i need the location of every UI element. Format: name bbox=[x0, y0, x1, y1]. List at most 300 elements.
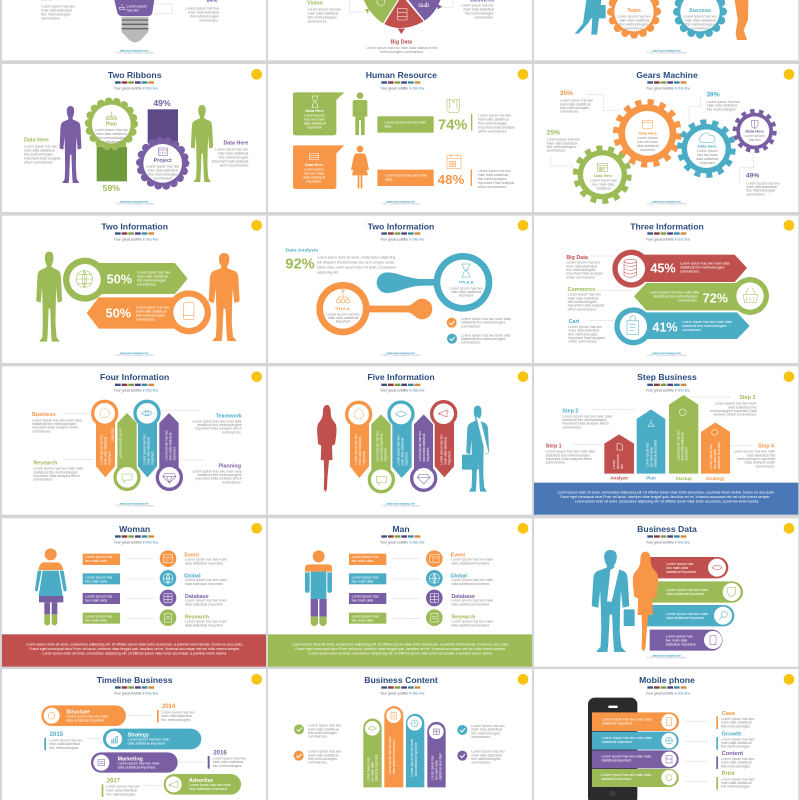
green arrow: 72% bbox=[703, 291, 728, 305]
panel: light bulb slide: © 2017 The Name Rockford Importers bbox=[115, 51, 155, 54]
label: Print: main data statistical bbox=[721, 781, 752, 785]
green bar: data. bbox=[384, 124, 392, 128]
panel: Human Resource: © 2017 The Name Rockford Importers bbox=[381, 203, 421, 206]
gear: orange: data statistical bbox=[637, 144, 659, 148]
orange bar bbox=[377, 170, 434, 186]
step house: Analyze: Lorem bbox=[612, 460, 616, 469]
title: Step Business bbox=[637, 372, 697, 382]
label: Step 2: statistical this methodologies bbox=[562, 418, 607, 422]
pill: Advertise: data statistical important. bbox=[189, 787, 228, 791]
stat 48%: which summarizes bbox=[478, 185, 507, 189]
orange arrow: main data statistical bbox=[136, 309, 167, 313]
column: red bbox=[432, 402, 456, 477]
label: Content: Lorem Ipsum has two bbox=[721, 757, 754, 761]
label: Planning: Important Data analysis which bbox=[195, 477, 242, 481]
Data Analysis stat: 92% bbox=[285, 256, 315, 272]
panel: Team and Success slide: © 2017 The Name Rockford Importers bbox=[647, 51, 687, 54]
column: green: main data statistical bbox=[379, 433, 383, 461]
text band: Lorem ipsum dolor sit amet, consectetur adipiscing elit. Ut efficitur ipsum vitae tortor accumsan, a pulvinar lorem lacinia. Donec eu arcu justo. bbox=[26, 642, 243, 646]
label: Commerce: main data statistical bbox=[568, 296, 598, 300]
column: blue: Lorem Ipsum has two bbox=[142, 434, 146, 465]
label: Research: Research bbox=[33, 461, 57, 467]
panel: Timeline Business: Your great subtitle in this line bbox=[114, 691, 158, 695]
pill: purple: Lorem Ipsum has bbox=[666, 634, 693, 638]
row: Global bbox=[349, 570, 493, 587]
label: Step 4: methodologies Important bbox=[737, 457, 775, 461]
label: Step 2: Lorem Ipsum has two main data bbox=[562, 414, 612, 418]
label: Cart: this methodologies bbox=[568, 332, 598, 336]
phone bbox=[588, 698, 637, 800]
label: Business: statistical this methodologies bbox=[32, 422, 77, 426]
man silhouette legs bbox=[575, 0, 606, 35]
stat 49% bbox=[746, 173, 780, 196]
check: teal: Lorem Ipsum has two bbox=[471, 724, 505, 728]
gear: green bbox=[576, 148, 629, 201]
gear: Team: summarizes bbox=[625, 26, 644, 30]
step house: Plan: Plan bbox=[646, 476, 656, 481]
row: Database: Lorem Ipsum has bbox=[85, 594, 113, 598]
Data Analysis stat bbox=[285, 248, 397, 275]
label: Research: Important Data analysis which bbox=[33, 474, 80, 478]
panel: Gears Machine: www.yourcompany.com bbox=[653, 201, 682, 204]
text band: Lorem ipsum dolor sit amet, consectetur adipiscing elit. Ut efficitur ipsum vitae tortor accumsan, a pulvinar lorem lacinia. Donec eu arcu justo. bbox=[292, 642, 509, 646]
check item 1: statistical this methodologies bbox=[461, 321, 506, 325]
label: Big Data: this methodologies bbox=[566, 268, 596, 272]
panel: Woman: Your great subtitle in this line bbox=[114, 540, 158, 544]
gear: blue bbox=[680, 122, 733, 175]
badge bbox=[251, 69, 262, 80]
row: Global: two main data bbox=[85, 579, 107, 583]
label: Step 3: Step 3 bbox=[739, 395, 755, 401]
gear: green: two main data bbox=[592, 183, 614, 187]
orange arrow: Lorem Ipsum has two bbox=[136, 305, 169, 309]
pill: red: statistical important bbox=[666, 570, 696, 574]
Business text: summarizes. bbox=[474, 15, 494, 19]
label: Planning bbox=[192, 463, 242, 484]
pill: Advertise: Advertise bbox=[189, 778, 213, 784]
Data Analysis stat: adipiscing elit. bbox=[317, 271, 339, 275]
check item 2: statistical this methodologies bbox=[461, 337, 506, 341]
row: Global: Lorem Ipsum has bbox=[85, 575, 113, 579]
label: Growth: this methodologies bbox=[721, 745, 750, 749]
step house: Plan: two main data bbox=[649, 447, 653, 467]
panel: Two Information arrows: © 2017 The Name Rockford Importers bbox=[115, 354, 155, 357]
label: Commerce: this methodologies bbox=[568, 300, 597, 304]
step house: Analyze: Ipsum has bbox=[616, 454, 620, 469]
orange connector circle: main data statistical bbox=[328, 316, 359, 320]
gear: green: statistical bbox=[596, 187, 611, 191]
column: orange: data statistical important bbox=[392, 740, 396, 774]
column: purple: main data statistical bbox=[168, 432, 172, 460]
gear: orange: has two main bbox=[637, 140, 658, 144]
row: Database: data statistical important. bbox=[185, 603, 224, 607]
year 2017: this methodologies bbox=[106, 792, 136, 796]
gear: Success bbox=[677, 0, 723, 35]
label: Content: main data statistical bbox=[721, 761, 752, 765]
gear: purple: has two bbox=[749, 138, 761, 142]
band: Print: Lorem Ipsum has two main data bbox=[601, 773, 651, 777]
panel: Gears Machine: © 2017 The Name Rockford Importers bbox=[647, 203, 687, 206]
bulb base: Lorem Ipsum bbox=[127, 4, 147, 8]
check item 2 bbox=[447, 333, 511, 345]
label: Step 4: data statistical this bbox=[747, 453, 776, 457]
row: Global: Global bbox=[184, 574, 201, 580]
text band: Fusce eget consequat risus Proin vel lacus, interdum vitae feugiat quis, faucibus vel mi. Vivamus accumsan nisl vel nulla viverra semper. bbox=[560, 495, 770, 499]
panel: Two Information blobs bbox=[268, 216, 532, 363]
label: Case: Case bbox=[722, 711, 735, 717]
check: purple: Lorem Ipsum has two bbox=[471, 750, 505, 754]
column: green: important. bbox=[111, 428, 115, 442]
label: Cart: Lorem Ipsum has two bbox=[568, 325, 602, 329]
red arrow: summarizes. bbox=[680, 270, 700, 274]
check item 2: Lorem Ipsum has two main data bbox=[461, 333, 511, 337]
label: Research: summarizes. bbox=[33, 478, 53, 482]
label: Case bbox=[716, 711, 754, 729]
row: Research: Research bbox=[185, 615, 209, 621]
check item 1: Lorem Ipsum has two main data bbox=[461, 317, 511, 321]
gear: orange: important bbox=[640, 148, 655, 152]
title: Human Resource bbox=[366, 70, 437, 80]
ribbon: Plan: Plan bbox=[106, 122, 117, 128]
column: green: Lorem Ipsum has bbox=[367, 757, 371, 782]
check: purple: this methodologies bbox=[471, 757, 501, 761]
panel: Human Resource bbox=[268, 64, 532, 212]
row: Database: Lorem Ipsum has bbox=[352, 594, 379, 598]
label: Content: Content bbox=[722, 751, 743, 757]
green callout: Lorem Ipsum bbox=[304, 114, 325, 118]
label: Step 1 bbox=[546, 444, 595, 465]
pill: blue bbox=[646, 605, 734, 626]
row: Event: data statistical important. bbox=[185, 561, 224, 565]
Business text: main data statistical bbox=[463, 7, 494, 11]
column: blue: Lorem Ipsum has two bbox=[397, 435, 401, 466]
check: orange: summarizes. bbox=[308, 761, 328, 765]
column: green bbox=[363, 718, 382, 787]
label: Growth bbox=[716, 731, 754, 750]
step house: Strategy: Strategy bbox=[706, 476, 725, 481]
column: purple bbox=[427, 722, 446, 787]
pill: purple bbox=[650, 630, 722, 651]
badge bbox=[518, 674, 528, 685]
stat 35%: summarizes bbox=[560, 110, 579, 114]
column: purple: important. bbox=[172, 446, 176, 460]
panel: Four Information: © 2017 The Name Rockford Importers bbox=[115, 505, 155, 508]
row: Global: two main data bbox=[352, 579, 373, 583]
orange callout: data statistical bbox=[303, 176, 325, 180]
left stat: summarizes. bbox=[41, 16, 61, 20]
label: Growth: Lorem Ipsum has two bbox=[721, 737, 754, 741]
left stat: main data statistical bbox=[41, 8, 72, 12]
panel: Mobile phone bbox=[534, 669, 798, 800]
year 2014: 2014 bbox=[162, 704, 176, 710]
check: teal bbox=[457, 724, 505, 739]
orange connector circle: TITLE A bbox=[335, 306, 350, 311]
panel: light bulb slide bbox=[2, 0, 266, 60]
pill: Marketing: data statistical important. bbox=[118, 765, 156, 769]
stat 25%: this methodologies bbox=[547, 145, 576, 149]
label: Step 1: Lorem Ipsum has two main data bbox=[546, 450, 595, 454]
column: blue bbox=[135, 401, 159, 477]
right text: Lorem Ipsum has two bbox=[215, 147, 248, 151]
green callout: data statistical bbox=[304, 122, 326, 126]
label: Step 3: methodologies Important Data bbox=[710, 409, 757, 413]
band: Growth bbox=[592, 732, 679, 750]
check: purple: summarizes. bbox=[471, 761, 491, 765]
pill: Structure bbox=[41, 705, 126, 726]
right text: this methodologies bbox=[219, 155, 249, 159]
label: Print bbox=[716, 771, 754, 790]
orange bar: Lorem Ipsum has two main bbox=[385, 174, 427, 178]
ribbon: Project: Lorem Ipsum has two bbox=[146, 165, 179, 169]
step house: Startup: main data statistical bbox=[681, 432, 685, 460]
row: Research bbox=[83, 609, 227, 627]
ribbon: Plan bbox=[89, 101, 134, 193]
panel: Human Resource: Your great subtitle in this line bbox=[380, 86, 425, 90]
right text: which summarizes bbox=[220, 163, 249, 167]
year 2017: Lorem Ipsum has two bbox=[106, 785, 140, 789]
label: Big Data: Important Data analysis bbox=[566, 272, 603, 276]
Big Data text: Lorem Ipsum has two main data statistical this bbox=[366, 46, 438, 50]
year 2015: 2015 bbox=[50, 732, 64, 738]
step house: Plan bbox=[637, 409, 665, 481]
text band bbox=[268, 634, 532, 667]
green man bbox=[36, 252, 62, 342]
column: purple: two main data bbox=[435, 760, 439, 780]
column: purple: Lorem Ipsum has bbox=[431, 755, 435, 780]
label: Step 2: summarizes. bbox=[562, 425, 582, 429]
text band: Fusce eget consequat risus Proin vel lacus, interdum vitae feugiat quis, faucibus vel mi. Vivamus accumsan nisl vel nulla viverra semper. bbox=[295, 647, 506, 651]
woman icon bbox=[351, 146, 369, 189]
left text: this methodologies bbox=[24, 152, 53, 156]
column: purple bbox=[412, 414, 436, 490]
green callout: important. bbox=[307, 126, 322, 130]
panel: Three Information bbox=[534, 216, 798, 363]
row: Research: Lorem Ipsum has bbox=[352, 614, 379, 618]
panel: Gears Machine bbox=[534, 64, 798, 212]
label: Case: main data statistical bbox=[721, 721, 752, 725]
Vision text: Vision bbox=[307, 1, 323, 7]
teal connector circle: TITLE B bbox=[458, 280, 474, 285]
row: Global bbox=[83, 570, 227, 587]
label: Step 4: Lorem Ipsum has two main bbox=[733, 450, 775, 454]
stat 25%: main data statistical bbox=[547, 141, 577, 145]
row: Database: Lorem Ipsum has two main bbox=[451, 599, 493, 603]
panel: Gears Machine: Your great subtitle in this line bbox=[646, 86, 690, 90]
row: Database bbox=[83, 590, 227, 607]
Vision text: this methodologies bbox=[308, 15, 337, 19]
year 2016: main data statistical bbox=[213, 760, 243, 764]
panel: Step Business: Your great subtitle in this line bbox=[646, 388, 690, 392]
gear: Team: main data statistical bbox=[619, 18, 650, 22]
label: Commerce bbox=[568, 287, 605, 311]
panel: Two Information blobs: Your great subtitle in this line bbox=[380, 237, 425, 241]
bulb base bbox=[114, 0, 173, 42]
year 2016 bbox=[208, 750, 246, 769]
teal connector circle: important bbox=[459, 294, 473, 298]
label: Teamwork: Important Data analysis which bbox=[195, 427, 242, 431]
blue arrow: Lorem Ipsum has two main data bbox=[682, 320, 732, 324]
title: Business Content bbox=[364, 675, 438, 685]
gear: orange: Data Here bbox=[638, 130, 658, 135]
gear: blue: has two main bbox=[697, 153, 718, 157]
label: Content bbox=[716, 751, 754, 769]
badge bbox=[251, 674, 262, 685]
orange callout: Lorem Ipsum bbox=[304, 168, 324, 172]
column: orange: important. bbox=[108, 451, 112, 465]
pill: Structure: data statistical important. bbox=[66, 719, 105, 723]
row: Global: data statistical important. bbox=[185, 582, 224, 586]
stat 74%: 74% bbox=[438, 117, 467, 133]
step house: Strategy: two main data bbox=[713, 449, 717, 469]
title: Two Ribbons bbox=[108, 70, 162, 80]
label: Planning: summarizes. bbox=[222, 480, 242, 484]
panel: Four Information: Your great subtitle in this line bbox=[114, 388, 158, 392]
step house: Startup: Lorem Ipsum has two bbox=[677, 430, 681, 460]
pill: Strategy bbox=[103, 729, 201, 749]
row: Event: Lorem Ipsum has two main bbox=[185, 557, 227, 561]
row: Research bbox=[349, 609, 493, 627]
right stat: this methodologies bbox=[190, 14, 219, 18]
green arrow: summarizes. bbox=[137, 283, 157, 287]
label: Business: summarizes. bbox=[32, 429, 52, 433]
stat 49%: main data statistical bbox=[746, 185, 777, 189]
row: Event: Event bbox=[451, 553, 465, 559]
label: Business: Important Data analysis which bbox=[32, 426, 79, 430]
panel: Two Ribbons bbox=[2, 64, 266, 212]
column: orange bbox=[347, 402, 371, 478]
ribbon: Plan: summarizes bbox=[102, 140, 121, 144]
column: blue: main data statistical bbox=[146, 437, 150, 465]
row: Event: Lorem Ipsum has bbox=[352, 555, 379, 559]
check: purple: main data statistical bbox=[471, 753, 502, 757]
panel: Business Data: © 2017 The Name Rockford Importers bbox=[647, 657, 687, 660]
label: Content: this methodologies bbox=[721, 764, 750, 768]
badge bbox=[251, 371, 262, 382]
check: purple bbox=[457, 750, 505, 765]
row: Event: Lorem Ipsum has two main bbox=[451, 557, 493, 561]
label: Big Data bbox=[566, 255, 603, 279]
pill: purple: two main data bbox=[666, 638, 687, 642]
label: Planning: Planning bbox=[218, 463, 241, 469]
orange callout: important. bbox=[306, 180, 322, 184]
year 2016: this methodologies bbox=[213, 764, 242, 768]
left text: Data Here bbox=[24, 138, 49, 144]
check: orange: this methodologies bbox=[308, 757, 337, 761]
band: Case: statistical important. bbox=[602, 721, 633, 725]
stat 25% bbox=[547, 129, 580, 153]
pill: green: data statistical important bbox=[666, 592, 704, 596]
check: green bbox=[294, 724, 341, 739]
stat 25%: summarizes bbox=[547, 149, 566, 153]
woman silhouette legs bbox=[735, 0, 748, 40]
text band: Lorem ipsum dolor sit amet, consectetur adipiscing elit. Ut efficitur ipsum vitae tortor accumsan, a pulvinar lorem lacinia. bbox=[42, 652, 227, 656]
label: Teamwork bbox=[192, 413, 242, 434]
text band: Lorem ipsum dolor sit amet, consectetur adipiscing elit. Ut efficitur ipsum vitae tortor accumsan, a pulvinar lorem lacinia. Donec eu arcu justo. bbox=[558, 490, 775, 494]
green callout: Data Here bbox=[305, 108, 325, 113]
label: Print: Lorem Ipsum has two bbox=[721, 777, 754, 781]
green bar bbox=[377, 116, 434, 133]
left text bbox=[24, 138, 61, 164]
ribbon: Plan: this methodologies bbox=[97, 136, 126, 140]
badge bbox=[784, 523, 794, 534]
panel: Two Information arrows bbox=[2, 216, 266, 363]
ribbon: Project: main data statistical bbox=[147, 169, 178, 173]
Business text: Lorem Ipsum has two bbox=[461, 3, 494, 7]
label: Step 2: Important Data analysis which bbox=[562, 422, 609, 426]
red arrow: statistical this methodologies bbox=[680, 266, 725, 270]
badge bbox=[518, 523, 528, 534]
label: Step 3: Lorem Ipsum has two main bbox=[715, 402, 757, 406]
label: Teamwork: summarizes. bbox=[222, 430, 242, 434]
label: Step 4: summarizes. bbox=[756, 464, 775, 468]
right text: main data statistical bbox=[218, 151, 249, 155]
pill: red bbox=[643, 557, 728, 578]
green arrow: summarizes. bbox=[678, 299, 698, 303]
check: teal: main data statistical bbox=[471, 728, 502, 732]
row: Event: data statistical important. bbox=[451, 561, 490, 565]
row: Research: Research bbox=[451, 615, 475, 621]
teal connector circle: Lorem Ipsum has two bbox=[449, 286, 483, 290]
check item 1: summarizes. bbox=[461, 324, 481, 328]
panel: Two Ribbons: © 2017 The Name Rockford Importers bbox=[115, 203, 155, 206]
label: Research bbox=[33, 461, 83, 482]
green arrow bbox=[63, 258, 188, 302]
label: Cart: which summarizes bbox=[568, 340, 597, 344]
label: Step 4 bbox=[733, 443, 776, 468]
year 2015: this methodologies bbox=[49, 746, 79, 750]
green callout bbox=[293, 92, 344, 135]
column: blue bbox=[389, 402, 413, 478]
column: green: statistical important bbox=[375, 755, 379, 782]
row: Event: two main data bbox=[352, 559, 373, 563]
ribbon: Project bbox=[140, 98, 185, 186]
gear: orange: Lorem Ipsum bbox=[637, 136, 658, 140]
Data Analysis stat: Lorem ipsum dolor sit amet, consectetur adipiscing bbox=[317, 256, 395, 260]
column: purple: main data statistical bbox=[422, 433, 426, 461]
step house: Startup: Startup bbox=[676, 476, 692, 481]
orange arrow: 50% bbox=[106, 307, 131, 321]
check item 2: summarizes. bbox=[461, 341, 481, 345]
column: orange: main data statistical bbox=[358, 437, 362, 465]
title: Two Information bbox=[368, 221, 434, 231]
step house: Strategy: Lorem Ipsum has bbox=[709, 444, 713, 469]
pill: blue: Lorem Ipsum has two main bbox=[666, 612, 708, 616]
label: Step 2: Step 2 bbox=[562, 408, 578, 414]
label: Cart bbox=[568, 319, 605, 344]
pill: green bbox=[646, 581, 743, 603]
green arrow: this methodologies bbox=[137, 279, 166, 283]
check: green: Lorem Ipsum has two bbox=[308, 724, 341, 728]
row: Global: data statistical important. bbox=[451, 582, 490, 586]
label: Case: this methodologies bbox=[721, 724, 750, 728]
stat 74%: main data statistical bbox=[478, 118, 509, 122]
gear: purple: Lorem Ipsum bbox=[744, 134, 765, 138]
panel: Three Information: Your great subtitle in this line bbox=[646, 237, 690, 241]
panel: Human Resource: www.yourcompany.com bbox=[387, 201, 416, 204]
right stat: Lorem Ipsum has two bbox=[186, 6, 219, 10]
pill: Strategy: Lorem Ipsum has two main bbox=[128, 738, 170, 742]
band: Growth: statistical important. bbox=[602, 740, 633, 744]
label: Step 3 bbox=[710, 395, 757, 417]
panel: Five Information: Your great subtitle in this line bbox=[380, 388, 425, 392]
step house: Startup: important bbox=[685, 447, 689, 460]
column: purple: Lorem Ipsum has two bbox=[164, 430, 168, 460]
band: Print: statistical important. bbox=[601, 777, 632, 781]
year 2016: 2016 bbox=[213, 750, 227, 756]
row: Global: Global bbox=[450, 574, 467, 580]
blue arrow: 41% bbox=[652, 320, 678, 334]
label: Cart: Important Data analysis bbox=[568, 336, 605, 340]
